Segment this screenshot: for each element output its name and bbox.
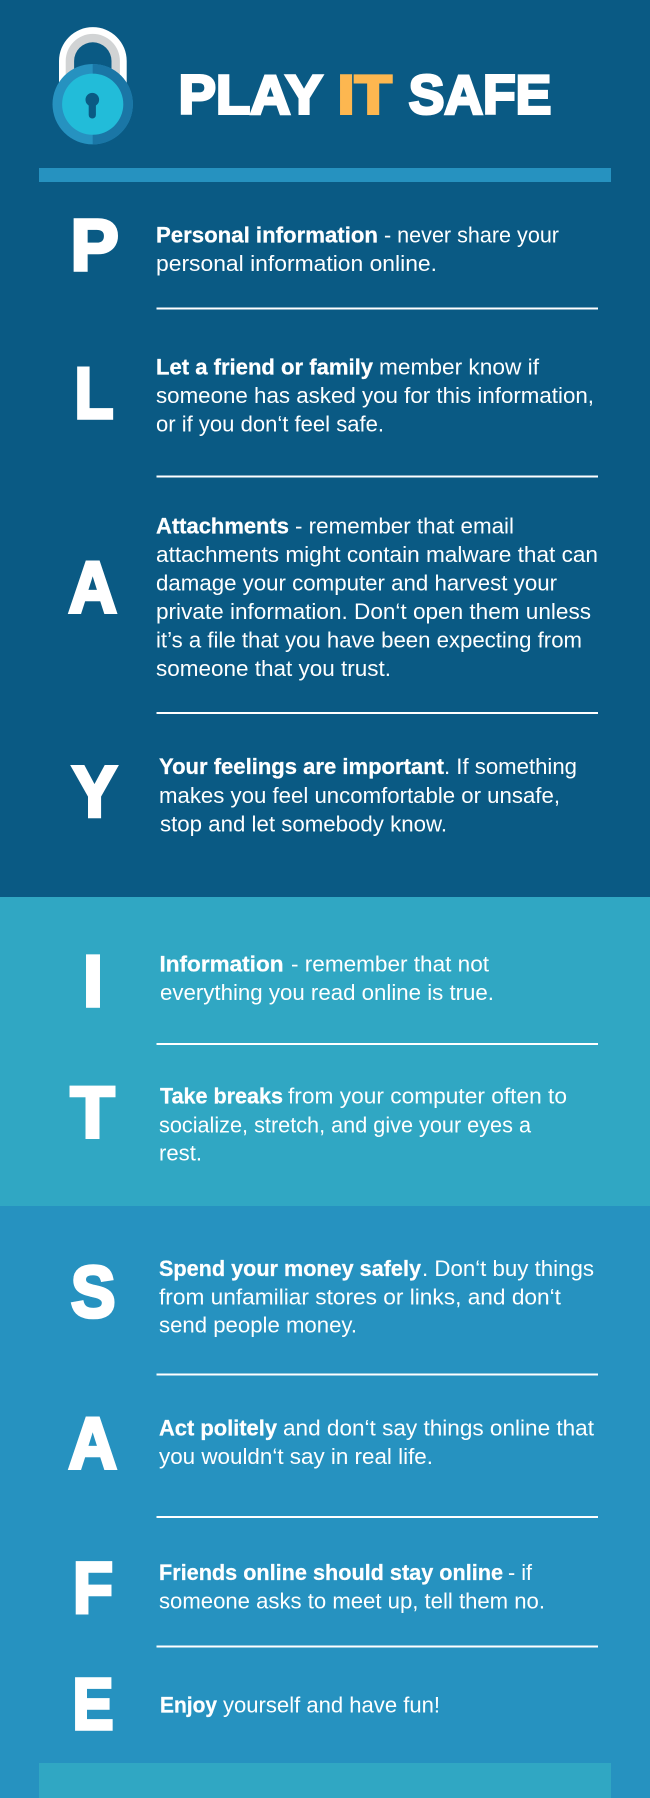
text: attachments: - remember that email (295, 513, 514, 538)
text: friends online: Friends online should stay online (159, 1560, 503, 1585)
text: spend your money (159, 1256, 594, 1338)
text: your feelings (159, 754, 577, 837)
text: let a friend or family: member know if (379, 354, 540, 379)
text: attachments: Attachments (156, 513, 289, 538)
text: friends online: - if (508, 1560, 533, 1585)
letter A: A (68, 548, 117, 628)
text: information: everything you read online is true. (160, 980, 494, 1005)
panel: IT section (0, 897, 650, 1206)
title (179, 64, 551, 126)
text: let a friend or family: someone has asked you for this information, (156, 383, 594, 408)
text: take breaks (159, 1083, 567, 1166)
text: spend your money: from unfamiliar stores or links, and don‘t (159, 1284, 561, 1309)
text: friends online: someone asks to meet up, tell them no. (159, 1588, 545, 1613)
letter S: S (71, 1253, 116, 1333)
text: let a friend or family (156, 354, 594, 437)
text: spend your money: send people money. (159, 1313, 357, 1338)
text: spend your money: . Don‘t buy things (422, 1256, 594, 1281)
text: your feelings: stop and let somebody know. (160, 812, 447, 837)
text: your feelings: Your feelings are important (159, 754, 445, 779)
text: enjoy: yourself and have fun! (223, 1692, 440, 1717)
text: your feelings: . If something (444, 754, 577, 779)
header divider bar (39, 168, 611, 182)
letter Y: Y (72, 752, 117, 832)
text: personal information: - never share your (384, 222, 559, 248)
title: IT (338, 64, 392, 126)
letter T: T (71, 1074, 115, 1154)
text: act politely: Act politely (159, 1416, 278, 1441)
text: act politely: and don‘t say things online that (283, 1416, 594, 1441)
letter L: L (74, 354, 114, 434)
text: attachments: it’s a file that you have been expecting from (156, 627, 582, 652)
text: take breaks: from your computer often to (288, 1083, 567, 1108)
text: act politely: you wouldn‘t say in real life. (159, 1444, 433, 1469)
text: attachments: damage your computer and harvest your (156, 570, 557, 595)
text: act politely (159, 1416, 594, 1469)
text: friends online (159, 1560, 545, 1613)
text: enjoy: Enjoy (160, 1692, 218, 1717)
text: attachments: attachments might contain malware that can (156, 542, 598, 567)
letter P: P (71, 206, 119, 286)
text: take breaks: rest. (159, 1141, 202, 1166)
text: take breaks: socialize, stretch, and give your eyes a (159, 1112, 532, 1137)
letter I: I (83, 942, 103, 1022)
footer band (39, 1763, 611, 1798)
panel: PLAY section (0, 0, 650, 897)
text: attachments: private information. Don‘t open them unless (156, 599, 591, 624)
text: information: Information (160, 951, 284, 976)
text: spend your money: Spend your money safely (159, 1256, 422, 1281)
text: personal information (156, 222, 559, 276)
text: take breaks: Take breaks (160, 1083, 283, 1108)
text: your feelings: makes you feel uncomfortable or unsafe, (159, 783, 560, 808)
title: SAFE (409, 64, 551, 126)
letter E: E (72, 1665, 114, 1745)
icon: padlock (52, 27, 133, 144)
text: let a friend or family: Let a friend or family (156, 354, 374, 379)
letter A: A (68, 1404, 117, 1484)
text: personal information: Personal information (156, 222, 378, 248)
text: let a friend or family: or if you don‘t feel safe. (156, 412, 384, 437)
text: information (160, 951, 494, 1005)
letter F: F (73, 1549, 113, 1629)
panel: SAFE section (0, 1206, 650, 1798)
text: information: - remember that not (291, 951, 489, 976)
text: attachments (156, 513, 598, 681)
text: attachments: someone that you trust. (156, 656, 391, 681)
text: personal information: personal information online. (156, 251, 437, 276)
title: PLAY (179, 64, 323, 126)
